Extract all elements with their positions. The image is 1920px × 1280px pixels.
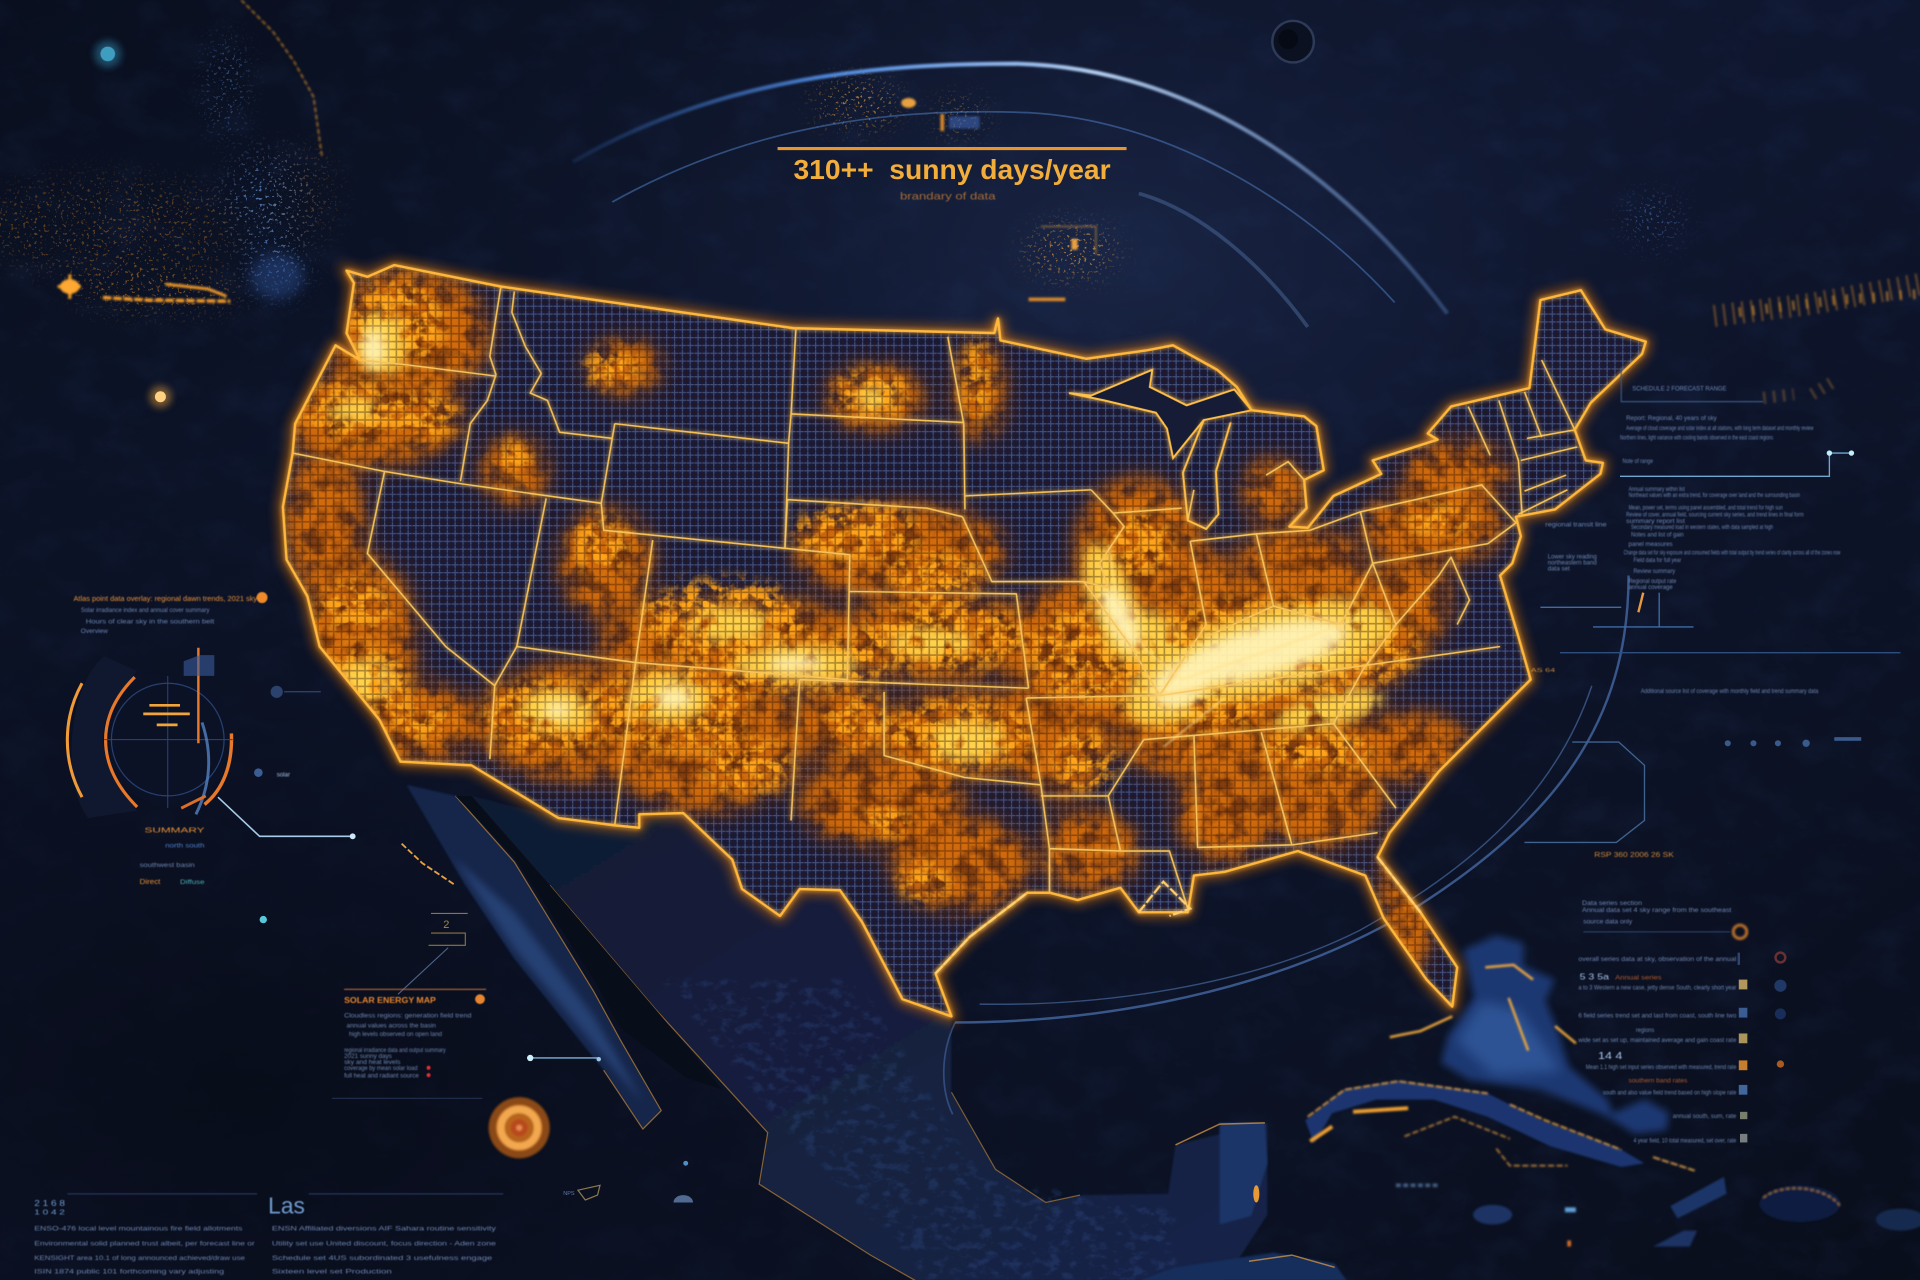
bottom middle text column: ENSN Affiliated diversions AIF Sahara routine sensitivity [272, 1226, 497, 1233]
right panel: lower table: Annual series [1615, 975, 1662, 982]
left panel: gauge footnotes: north south [165, 842, 204, 849]
right panel: lower table: southern band rates [1629, 1077, 1687, 1084]
blue lights: upper left [212, 34, 305, 295]
left panel: gauge footnotes: Diffuse [180, 879, 205, 886]
core heat band [328, 311, 1402, 760]
right panel: upper text list: annual coverage [1629, 584, 1673, 591]
hot spots layer [301, 280, 1473, 901]
right panel: side labels [1531, 522, 1819, 859]
right panel: lower table: Data series section [1582, 900, 1642, 907]
bottom left text column: ISIN 1874 public 101 forthcoming vary adjusting [34, 1268, 224, 1275]
map outline [283, 265, 1646, 1016]
right panel: upper text list: Annual summary within list [1629, 486, 1685, 493]
state borders [293, 287, 1577, 909]
moon icon [1272, 21, 1314, 62]
middle left text panel: regional irradiance data and output summary [344, 1047, 446, 1054]
bright city glow [60, 279, 80, 294]
callout: small marker above middle panel [398, 913, 468, 994]
right panel: upper text list: Average of cloud coverage and solar index at all stations, with long term dataset and monthly review [1626, 425, 1814, 432]
left panel: gauge footnotes: southwest basin [140, 862, 195, 869]
city lights: upper left [0, 147, 337, 309]
gulf coast glow detail [936, 857, 1420, 973]
left panel: caption: Solar irradiance index and annual cover summary [81, 607, 210, 614]
right panel: upper text list: Field data for full year [1633, 557, 1681, 564]
city lights: upper right [1714, 284, 1920, 398]
right panel: lower table: annual south, sum, rate [1673, 1113, 1737, 1120]
right panel: upper text list: Review summary [1633, 568, 1676, 575]
middle left text panel: SOLAR ENERGY MAP [344, 996, 437, 1005]
heat haze layer [288, 272, 1509, 971]
left panel: glowing dots [254, 686, 321, 923]
right panel: lower table: a to 3 Western a new case, jetty dense South, clearly short year [1578, 984, 1736, 991]
small lights above title [816, 84, 1116, 273]
right panel: lower table [1577, 900, 1737, 1144]
right panel: lower table: overall series data at sky, observation of the annual [1578, 956, 1736, 963]
middle left text panel: Cloudless regions: generation field trend [344, 1013, 471, 1020]
land: Baja California [402, 785, 661, 1129]
bottom middle text column [268, 1192, 503, 1275]
right panel: upper text list [1620, 367, 1841, 591]
title block [778, 147, 1127, 203]
small islands [563, 1161, 693, 1202]
right panel: upper text list: Secondary measured load in western states, with data sampled at high [1631, 524, 1773, 531]
bottom middle text column: Utility set use United discount, focus direction - Aden zone [272, 1240, 497, 1247]
river heat line [1108, 545, 1359, 747]
orbital arcs [573, 64, 1629, 1114]
broad warm glow [288, 272, 1509, 971]
right panel: upper text list: Regional output rate [1629, 578, 1677, 585]
bottom middle text column: Sixteen level set Production [272, 1268, 392, 1275]
lights cluster above title [901, 98, 1096, 301]
left panel: gauge footnotes: Direct [140, 877, 160, 886]
bottom left text column [34, 1194, 257, 1275]
right panel: side labels: Additional source list of coverage with monthly field and trend summary data [1641, 688, 1819, 695]
left panel: caption: Overview [81, 628, 108, 635]
left panel: gauge footnotes: solar [277, 771, 290, 778]
right panel: table icons [1733, 925, 1787, 1142]
land: Caribbean islands [1396, 1177, 1920, 1247]
middle left text panel: high levels observed on open land [349, 1031, 442, 1038]
middle left text panel: sky and heat levels [344, 1059, 400, 1066]
right panel: lower table: 4 year field, 10 total measured, set over, rate [1633, 1137, 1737, 1144]
middle left text panel: annual values across the basin [347, 1022, 436, 1029]
connector with dot [527, 1055, 601, 1061]
right panel: upper text list: Review of cover, annual field, sourcing current sky series, and trend lines in final form [1626, 512, 1804, 519]
land: Cuba [1305, 1081, 1695, 1171]
bottom left text column: KENSIGHT area 10.1 of long announced achieved/draw use [34, 1255, 246, 1262]
left panel: gauge footnotes: SUMMARY [144, 826, 205, 835]
title block: 310++ sunny days/year [793, 154, 1111, 185]
right panel: side labels: AS 64 [1531, 668, 1555, 674]
right panel: side labels: RSP 360 2006 26 SK [1594, 850, 1674, 859]
right panel: connector lines [1524, 450, 1900, 842]
right panel: lower table: 6 field series trend set and last from coast, south line two [1578, 1013, 1737, 1020]
right panel: side labels: data set [1548, 566, 1570, 573]
right panel: side labels: Lower sky reading [1548, 553, 1597, 560]
right panel: lower table: wide set as set up, maintained average and gain coast rate [1577, 1037, 1737, 1044]
callout: small marker above middle panel: 2 [443, 919, 449, 931]
left panel: caption [73, 592, 268, 635]
bottom left text column: Environmental solid planned trust albeit, per forecast line or [34, 1240, 255, 1247]
land: Mexico [471, 796, 1267, 1280]
bottom middle text column: Las [268, 1192, 305, 1218]
right panel: upper text list: Note of range [1622, 458, 1654, 465]
bottom left text column: ENSO-476 local level mountainous fire field allotments [34, 1226, 242, 1233]
right panel: side labels: northeastern band [1548, 559, 1597, 566]
right panel: lower table: 5 3 5a [1580, 972, 1609, 982]
small islands: NPS [563, 1191, 575, 1197]
blue terrain patch [250, 255, 304, 299]
right panel: upper text list: summary report list [1626, 518, 1685, 525]
right panel: lower table: source data only [1583, 918, 1633, 925]
left panel: caption: Hours of clear sky in the southern belt [86, 618, 215, 625]
middle left text panel [344, 989, 486, 1080]
right panel: lower table: south and also value field trend based on high slope rate [1603, 1090, 1737, 1097]
left panel: gauge footnotes [140, 771, 290, 886]
bottom left text column: 1 0 4 2 [34, 1208, 65, 1217]
land: Yucatan [1139, 1123, 1347, 1280]
right panel: upper text list: Northern lines, light variance with cooling bands observed in the east coast regions [1620, 435, 1773, 442]
right panel: lower table: 14 4 [1598, 1051, 1623, 1062]
bottom middle text column: Schedule set 4US subordinated 3 usefulness engage [272, 1255, 493, 1262]
core white heat [362, 329, 1353, 718]
right panel: lower table: Mean 1.1 high set input series observed with measured, trend rate [1586, 1064, 1737, 1071]
right panel: lower table: Annual data set 4 sky range from the southeast [1582, 907, 1732, 914]
right panel: upper text list: Northeast values with an extra trend, for coverage over land and the surrounding basin [1629, 492, 1800, 499]
title block: brandary of data [900, 192, 996, 203]
middle left text panel: coverage by mean solar load [344, 1065, 418, 1072]
right panel: upper text list: Notes and list of gain [1631, 531, 1684, 538]
middle left text panel: full heat and radiant source [344, 1073, 419, 1080]
gulf of California dark band [456, 796, 722, 1090]
right panel: upper text list: Mean, power set, terms using panel assembled, and total trend for high sun [1629, 504, 1783, 511]
right panel: small icons row [1725, 737, 1861, 747]
land: Bahamas blue shelf [1390, 936, 1669, 1134]
map glow halo [283, 265, 1646, 1016]
right panel: side labels: regional transit line [1545, 522, 1607, 529]
glowing dot: left [149, 386, 171, 408]
orange sun icon [489, 1097, 550, 1158]
map: United States heat map [284, 266, 1644, 1014]
orange city strip [58, 0, 322, 301]
bottom left text column: 2 1 6 8 [34, 1198, 65, 1208]
left panel: radial gauge [67, 648, 356, 839]
right panel: upper text list: Report: Regional, 40 years of sky [1626, 415, 1718, 422]
glowing dot: top left [94, 40, 121, 67]
right panel: upper text list: panel measures [1629, 541, 1673, 548]
right panel: upper text list: SCHEDULE 2 FORECAST RANGE [1632, 386, 1727, 393]
left panel: caption: Atlas point data overlay: regional dawn trends, 2021 sky [73, 594, 257, 603]
dark gap: northern great lakes [1069, 370, 1251, 458]
right panel: lower table: regions [1636, 1027, 1654, 1034]
middle left text panel: 2021 sunny days [344, 1053, 392, 1060]
lake michigan outline [1183, 420, 1231, 529]
